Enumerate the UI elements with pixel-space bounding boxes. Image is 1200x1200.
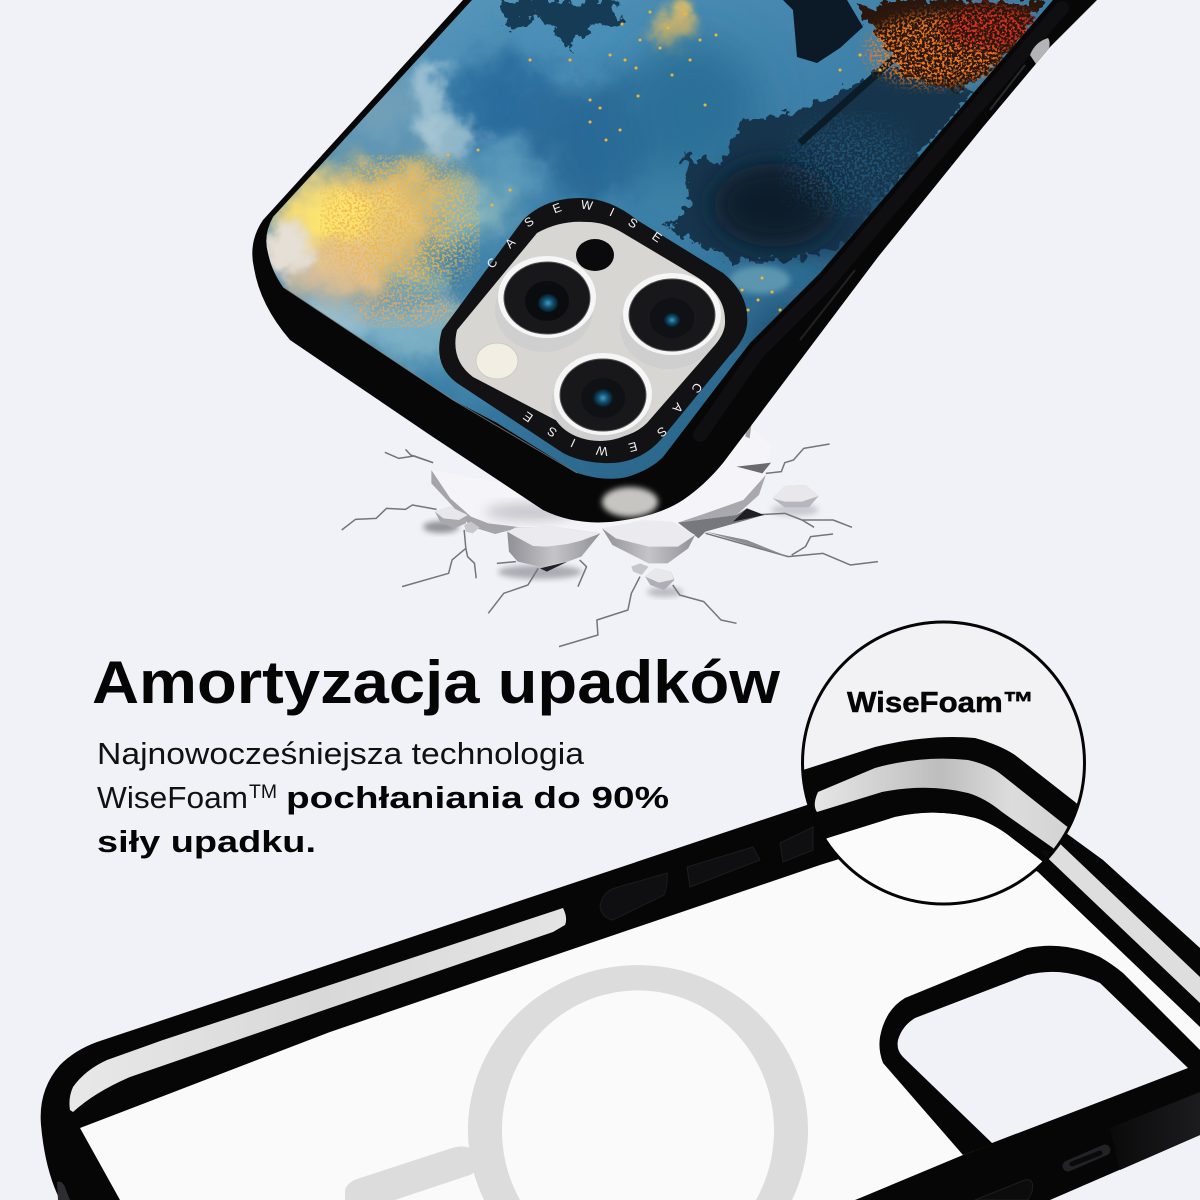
left clear slot bbox=[69, 908, 566, 1112]
broken plate right bbox=[602, 520, 695, 563]
casewise ring lettering: I bbox=[607, 205, 616, 219]
fracture walls bbox=[431, 420, 788, 572]
golden sunlight bbox=[266, 7, 695, 299]
magnifier ring bbox=[802, 622, 1084, 904]
small rocks bbox=[435, 485, 819, 590]
casewise ring lettering bbox=[484, 198, 705, 458]
case rim highlights bbox=[602, 8, 1062, 517]
camera cutout frame bbox=[879, 946, 1200, 1155]
crack lines bbox=[342, 444, 878, 647]
casewise ring lettering: E bbox=[551, 200, 563, 216]
camera island bbox=[439, 198, 747, 463]
casewise ring lettering: S bbox=[545, 424, 559, 440]
casewise ring lettering: S bbox=[626, 215, 640, 231]
light clearing under trees bbox=[730, 266, 790, 294]
case outer frame bbox=[252, 0, 1097, 522]
casewise ring lettering: S bbox=[522, 214, 537, 230]
body copy: WiseFoam bbox=[97, 780, 248, 815]
casewise ring lettering: C bbox=[484, 255, 500, 271]
casewise ring lettering: W bbox=[595, 443, 609, 458]
tree light flecks bbox=[790, 120, 910, 210]
titanium camera plate bbox=[455, 222, 725, 439]
sensor bbox=[576, 239, 614, 271]
magnetic ring bbox=[468, 965, 808, 1200]
speckled gold haze bbox=[320, 155, 480, 328]
casewise ring lettering: E bbox=[521, 409, 536, 425]
tree shadow core bbox=[713, 163, 837, 247]
casewise ring lettering: W bbox=[580, 198, 594, 213]
heading: Amortyzacja upadków bbox=[92, 649, 780, 716]
casewise ring lettering: S bbox=[654, 424, 669, 440]
tree trunk bbox=[800, 53, 900, 143]
bottom clear case bbox=[41, 767, 1200, 1200]
impact shadow bbox=[423, 503, 819, 597]
cracked ground impact bbox=[342, 420, 878, 647]
side buttons bbox=[600, 827, 813, 920]
body copy: siły upadku. bbox=[97, 824, 316, 859]
sky clouds bbox=[280, 14, 670, 395]
painted forest artwork bbox=[260, 0, 1060, 480]
right clear slot bbox=[1035, 839, 1200, 1003]
dark conifer trees bbox=[500, 0, 973, 262]
camera bumper ring bbox=[439, 198, 747, 463]
clear back interior bbox=[80, 837, 1200, 1200]
magnifier callout bbox=[801, 620, 1086, 906]
camera opening bbox=[898, 972, 1188, 1143]
screen edge highlight bbox=[283, 287, 577, 473]
casewise ring lettering: I bbox=[569, 436, 578, 450]
magnified case corner bbox=[804, 737, 1077, 870]
casewise ring lettering: E bbox=[649, 229, 664, 245]
casewise ring lettering: E bbox=[627, 439, 639, 455]
top phone with printed case bbox=[252, 0, 1097, 522]
casewise ring lettering: C bbox=[688, 380, 705, 396]
lens 2 bbox=[620, 273, 721, 369]
callout label: WiseFoam™ bbox=[847, 687, 1034, 719]
alignment pill bbox=[345, 1147, 480, 1200]
golden specks bbox=[440, 12, 880, 310]
lens 1 bbox=[495, 256, 596, 352]
body copy: Najnowocześniejsza technologia bbox=[97, 736, 585, 771]
autumn foliage bbox=[860, 0, 1045, 90]
case frame bbox=[41, 767, 1200, 1200]
body copy: pochłaniania do 90% bbox=[286, 780, 669, 815]
lower right sky bbox=[590, 40, 910, 470]
lens 3 bbox=[551, 353, 652, 441]
casewise ring lettering: A bbox=[669, 400, 686, 416]
broken plate left bbox=[507, 527, 600, 567]
body copy: TM bbox=[249, 782, 277, 803]
body copy bbox=[97, 736, 669, 859]
flash bbox=[476, 343, 518, 379]
bottom band ports bbox=[57, 1092, 1200, 1200]
casewise ring lettering: A bbox=[502, 235, 519, 251]
raised floor around impact bbox=[431, 420, 770, 533]
figure silhouette bbox=[783, 0, 863, 63]
